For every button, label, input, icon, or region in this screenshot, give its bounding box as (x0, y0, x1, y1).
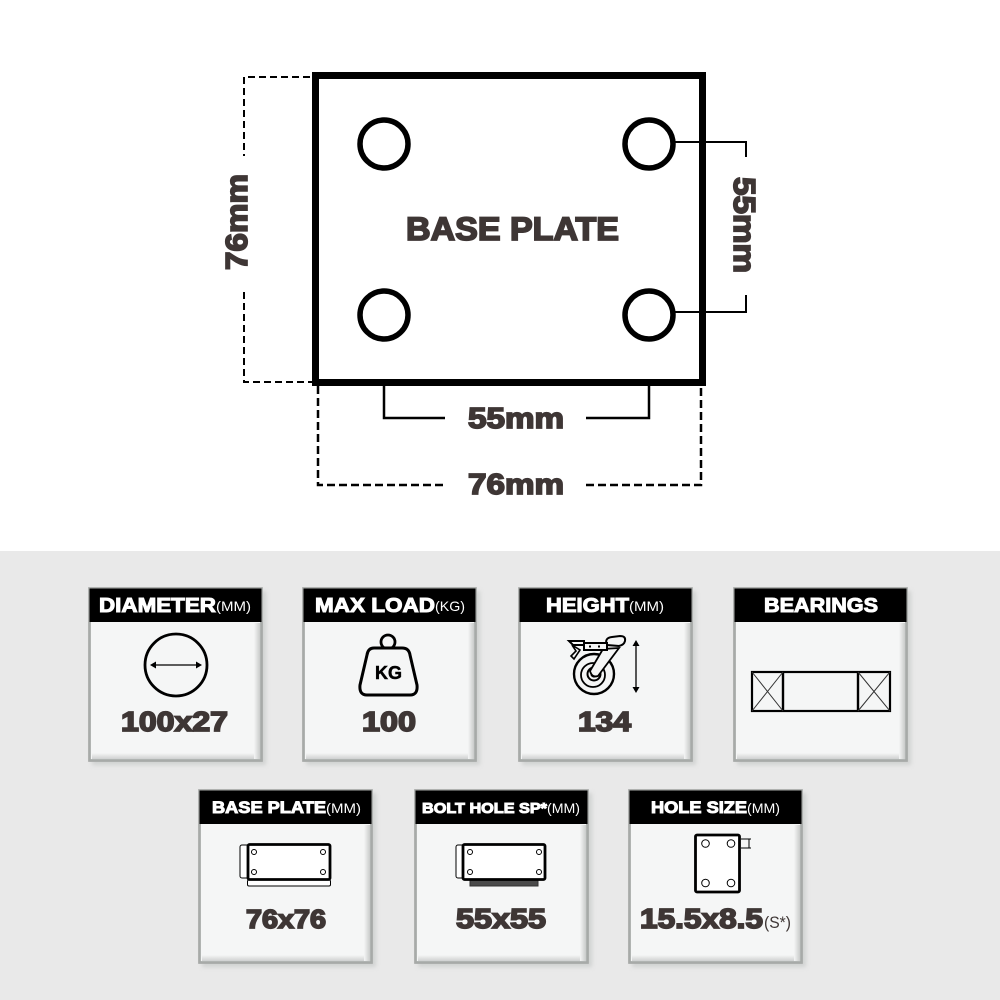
card: diameter (90, 588, 266, 765)
icon: hole size plate (696, 835, 751, 892)
icon: plate with bolt spacing (456, 844, 545, 886)
left dimension: 76mm: 76mm (219, 174, 254, 270)
bottom dimension: 55mm (384, 386, 649, 435)
plate outline (316, 76, 702, 382)
card: hole size (630, 790, 806, 967)
heading: BOLT HOLE SP* (422, 800, 547, 817)
right dimension: 55mm (675, 142, 762, 312)
icon: plate highlighted (240, 844, 330, 886)
panel: lower background (0, 551, 1000, 1000)
card: bolt hole spacing (416, 790, 592, 967)
left dimension: 76mm (219, 77, 312, 382)
heading: HOLE SIZE (651, 798, 747, 817)
heading: BASE PLATE (212, 798, 326, 817)
card: height: (MM) (629, 598, 664, 614)
card: hole size: (S*) (764, 913, 791, 932)
card: bearings (734, 588, 911, 765)
heading: DIAMETER (99, 595, 217, 617)
icon: height arrow (632, 640, 640, 693)
bottom dimension: 76mm: 76mm (468, 469, 564, 501)
bottom dimension: 76mm (318, 386, 701, 501)
card: height (520, 588, 696, 765)
icon: bearing section (752, 672, 890, 711)
card: bolt hole spacing: (MM) (547, 800, 580, 816)
heading: BEARINGS (764, 595, 878, 617)
right dimension: 55mm: 55mm (727, 177, 762, 273)
value: 100 (362, 706, 416, 737)
mounting holes (360, 120, 673, 339)
value: 100x27 (121, 706, 228, 737)
card: max load: (KG) (435, 598, 465, 614)
plate label: BASE PLATE (406, 211, 619, 247)
card: diameter: (MM) (216, 598, 251, 614)
heading: HEIGHT (546, 595, 629, 617)
icon: kg weight (360, 635, 417, 695)
heading: MAX LOAD (315, 595, 435, 617)
card: base plate (200, 790, 376, 967)
icon: kg weight: KG (375, 663, 402, 683)
card: max load (304, 588, 480, 765)
value: 55x55 (456, 903, 546, 934)
card: base plate: (MM) (326, 800, 361, 816)
value: 76x76 (246, 904, 326, 934)
value: 15.5x8.5 (640, 903, 763, 934)
value: 134 (578, 706, 631, 737)
bottom dimension: 55mm: 55mm (468, 403, 564, 435)
card: hole size: (MM) (747, 800, 780, 816)
base plate diagram (219, 76, 762, 501)
icon: circle with arrow (145, 634, 207, 696)
icon: castor wheel (569, 636, 625, 694)
